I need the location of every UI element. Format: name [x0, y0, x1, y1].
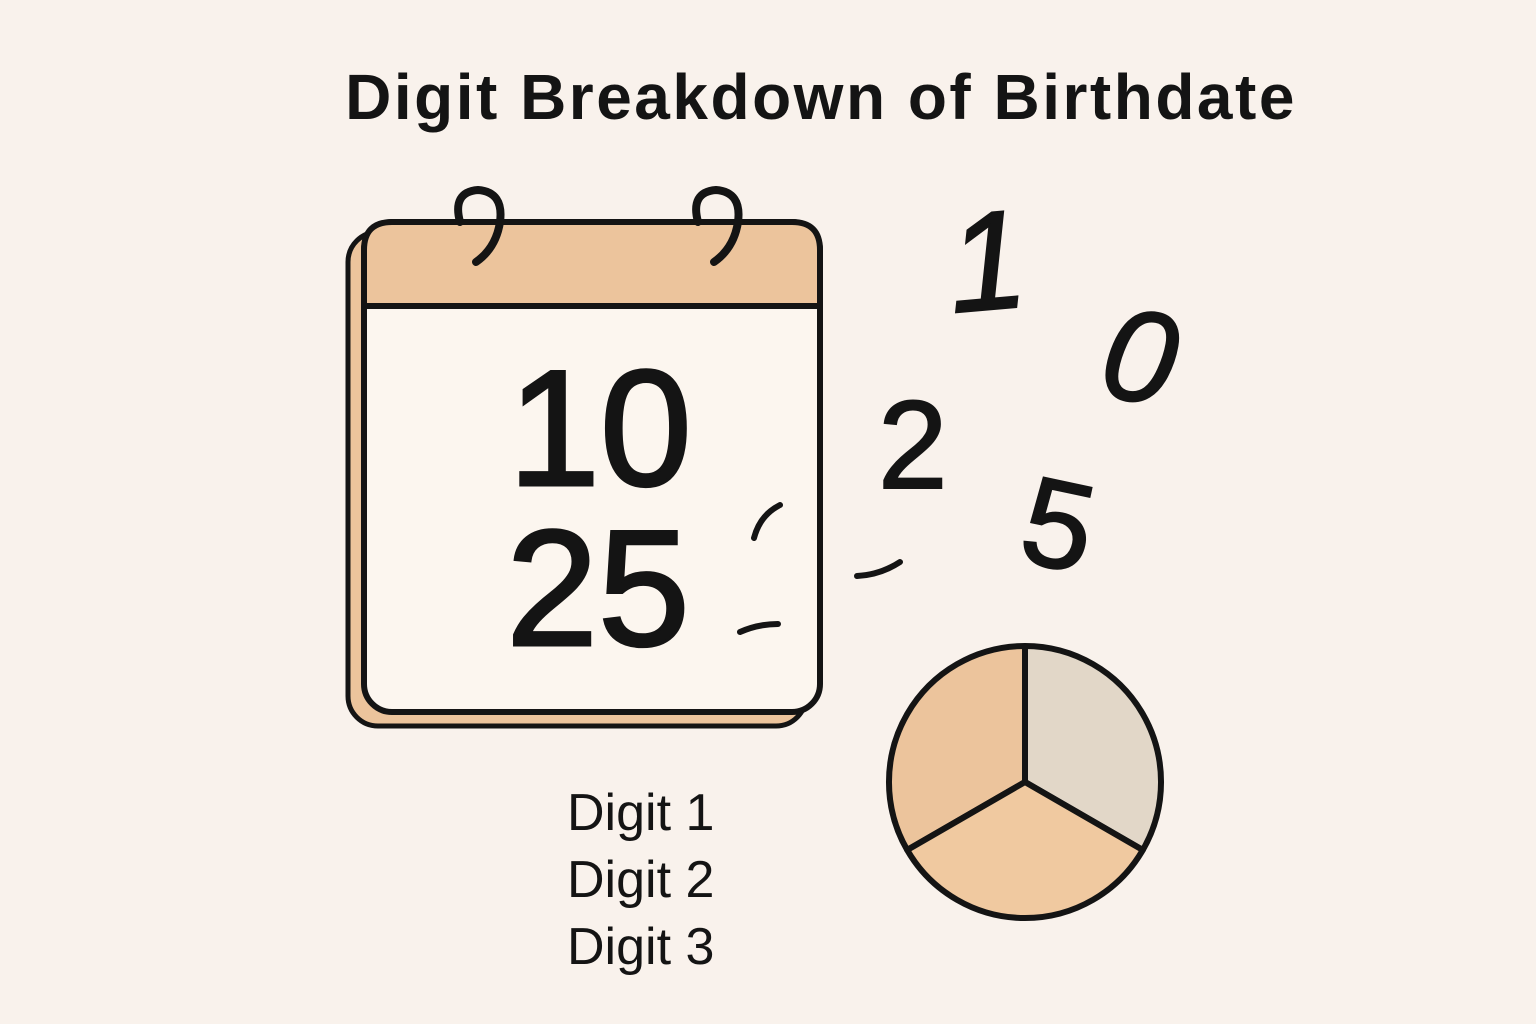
legend labels — [567, 784, 714, 976]
scattered digits — [878, 179, 1188, 600]
icon: rings — [458, 190, 739, 262]
calendar date text: 25 — [506, 496, 690, 680]
scattered digits: 1 — [941, 179, 1033, 342]
scattered digits: 0 — [1092, 278, 1188, 434]
legend labels: Digit 1 — [567, 784, 714, 842]
scattered digits: 5 — [1010, 450, 1107, 600]
legend labels: Digit 3 — [567, 918, 714, 976]
scattered digits: 2 — [878, 376, 948, 515]
legend labels: Digit 2 — [567, 851, 714, 909]
pie chart — [889, 646, 1161, 918]
calendar — [348, 190, 820, 726]
motion dashes — [740, 505, 900, 632]
calendar date text — [506, 336, 692, 680]
title: Digit Breakdown of Birthdate — [345, 61, 1297, 133]
calendar date text: 10 — [508, 336, 692, 520]
